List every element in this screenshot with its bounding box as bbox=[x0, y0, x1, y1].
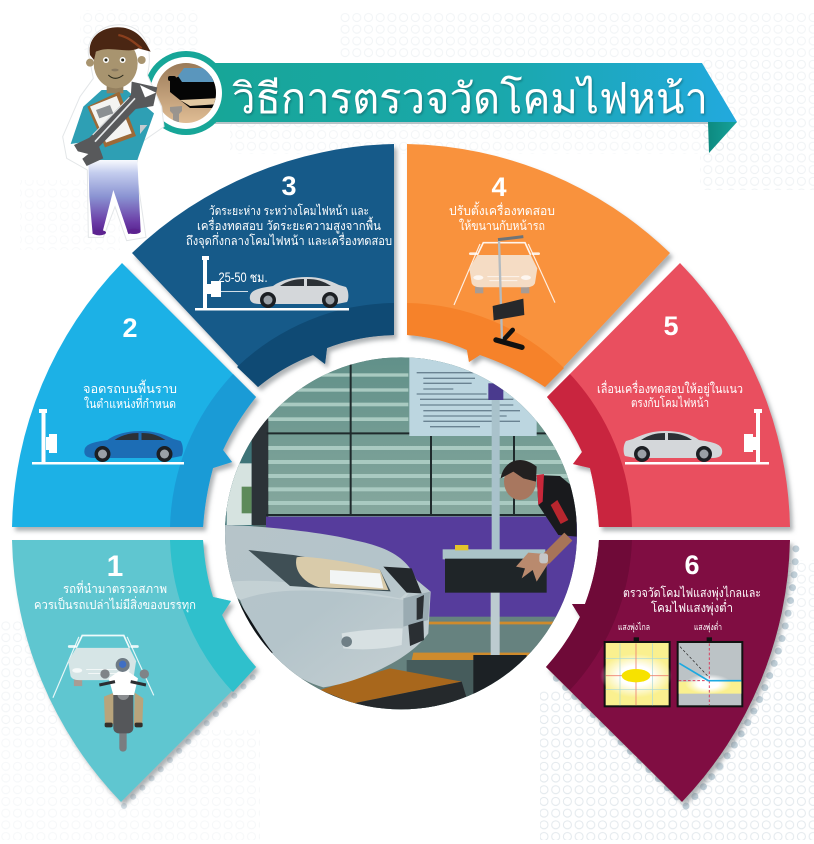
panel: step 2 bbox=[12, 263, 256, 527]
panel: step 3 bbox=[132, 144, 394, 387]
icon: blue car bbox=[84, 431, 183, 462]
icon: test stand bbox=[32, 409, 184, 464]
panel: step 5 bbox=[547, 263, 790, 527]
title banner bbox=[215, 63, 737, 153]
icon: headlight tester bbox=[493, 237, 524, 347]
step 2 number: 2 bbox=[122, 313, 138, 343]
panel: step 6 bbox=[546, 540, 790, 802]
mascot: mechanic holding wrench and clipboard bbox=[63, 25, 164, 241]
step 4 description: ให้ขนานกับหน้ารถ bbox=[459, 219, 545, 233]
step 3 description bbox=[186, 203, 392, 249]
step 6 description: ตรวจวัดโคมไฟแสงพุ่งไกลและ bbox=[623, 585, 761, 601]
low beam chart bbox=[678, 637, 742, 706]
icon: car in circle badge bbox=[148, 51, 222, 135]
step 5 description: เลื่อนเครื่องทดสอบให้อยู่ในแนว bbox=[597, 380, 743, 397]
step 1 description: รถที่นำมาตรวจสภาพ bbox=[63, 580, 167, 596]
step 3 description: ถึงจุดกึ่งกลางโคมไฟหน้า และเครื่องทดสอบ bbox=[186, 232, 392, 249]
step 4 number: 4 bbox=[491, 172, 507, 202]
icon: motorcycle rider bbox=[99, 658, 149, 752]
step 1 number: 1 bbox=[107, 550, 123, 583]
panel: step 1 bbox=[12, 540, 256, 802]
step 5 number: 5 bbox=[663, 311, 679, 341]
icon: test stand bbox=[625, 409, 769, 464]
distance label: 25-50 ชม. bbox=[218, 270, 268, 285]
step 2 description: ในตำแหน่งที่กำหนด bbox=[84, 395, 176, 411]
step 3 description: เครื่องทดสอบ วัดระยะความสูงจากพื้น bbox=[197, 216, 381, 234]
title text: วิธีการตรวจวัดโคมไฟหน้า bbox=[232, 74, 708, 122]
step 5 description bbox=[597, 380, 743, 410]
low beam label: แสงพุ่งต่ำ bbox=[694, 620, 722, 633]
step 5 description: ตรงกับโคมไฟหน้า bbox=[631, 395, 709, 410]
high beam label: แสงพุ่งไกล bbox=[618, 622, 650, 633]
icon: front view car bbox=[454, 243, 555, 305]
photo: technician aligning headlight tester bbox=[220, 350, 590, 720]
icon: silver car bbox=[250, 277, 348, 308]
step 4 description: ปรับตั้งเครื่องทดสอบ bbox=[449, 201, 555, 218]
panel: step 4 bbox=[407, 144, 670, 387]
step 3 description: วัดระยะห่าง ระหว่างโคมไฟหน้า และ bbox=[209, 203, 369, 218]
step 2 description: จอดรถบนพื้นราบ bbox=[83, 379, 177, 396]
step 1 description: ควรเป็นรถเปล่าไม่มีสิ่งของบรรทุก bbox=[34, 596, 196, 613]
step 2 description bbox=[83, 379, 177, 411]
icon: test stand with distance bbox=[195, 256, 349, 310]
step 6 description: โคมไฟแสงพุ่งต่ำ bbox=[651, 599, 733, 616]
step 6 number: 6 bbox=[684, 550, 700, 580]
icon: front view car behind bbox=[53, 636, 154, 698]
step 6 description bbox=[623, 585, 761, 616]
step 3 number: 3 bbox=[281, 171, 297, 201]
icon: silver car bbox=[624, 431, 722, 462]
high beam chart bbox=[600, 637, 672, 706]
step 1 description bbox=[34, 580, 196, 613]
step 4 description bbox=[449, 201, 555, 233]
